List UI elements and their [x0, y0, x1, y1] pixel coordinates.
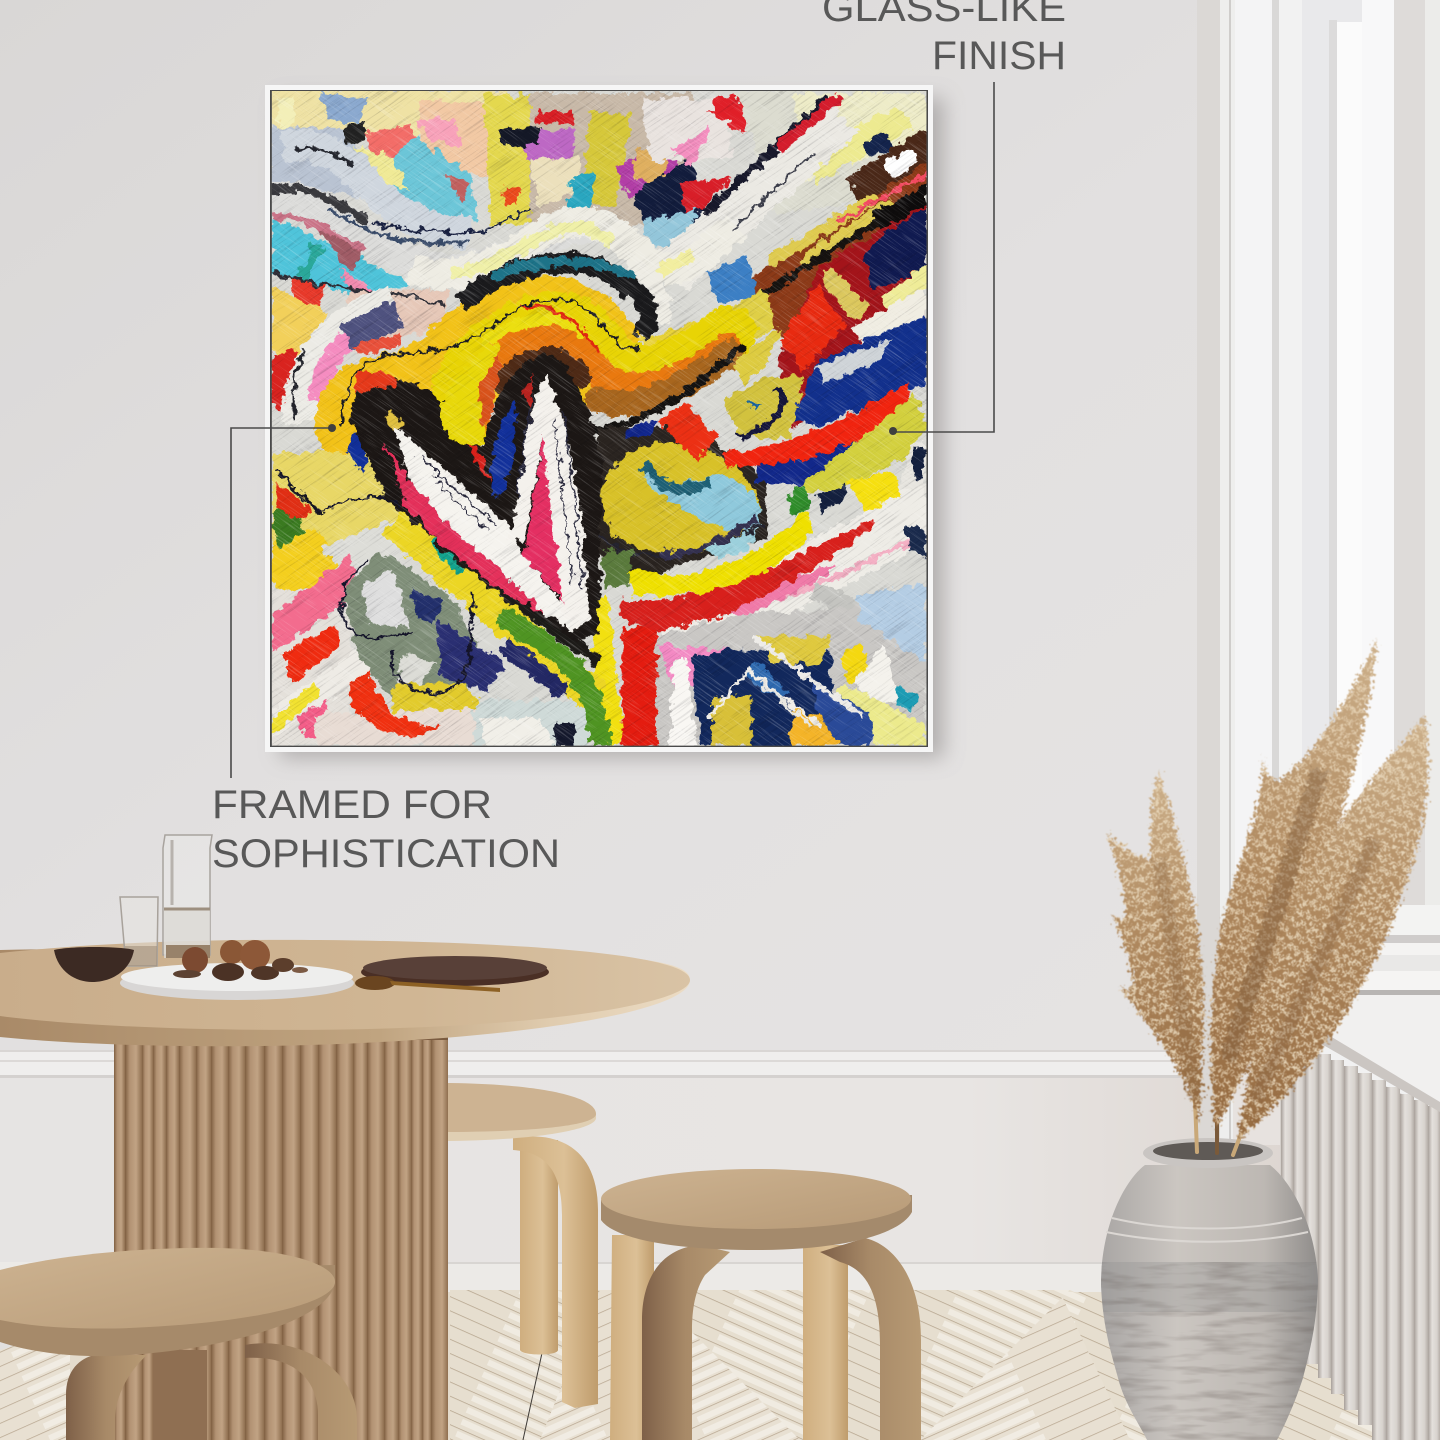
nuts on the board	[173, 940, 308, 981]
round table pedestal	[114, 1030, 448, 1440]
white lower band	[662, 508, 932, 640]
pampas plume center	[1210, 638, 1377, 1130]
callout: glass-like finish: FINISH	[932, 34, 1066, 78]
pampas stems	[1195, 1100, 1250, 1155]
red crescent	[348, 670, 444, 737]
red swoosh lower	[622, 519, 876, 630]
dark wooden plate	[361, 956, 549, 986]
dark wooden bowl	[54, 947, 134, 982]
yellow lobe over heart shoulder	[440, 341, 500, 444]
yellow diagonal band	[393, 521, 598, 743]
callout: framed for sophistication: SOPHISTICATION	[212, 832, 560, 876]
radiator	[1280, 1030, 1440, 1440]
ceramic vase	[1095, 1138, 1325, 1440]
shadow of framed painting	[280, 98, 944, 758]
yellow green block right	[797, 393, 926, 517]
left cyan and pink field	[272, 217, 449, 414]
glass tumbler	[120, 897, 158, 966]
lower right field	[656, 525, 926, 746]
callout: framed for sophistication	[212, 783, 560, 876]
window sill	[1320, 995, 1440, 1102]
left white pink sweep	[293, 305, 402, 423]
wooden spoon	[355, 976, 500, 992]
front stool seat	[601, 1169, 912, 1250]
heart white left arm	[393, 425, 574, 631]
dark streak above arc	[454, 249, 779, 347]
lower pink strip	[385, 442, 543, 613]
green tip	[786, 482, 812, 517]
window frame and panes	[1197, 0, 1440, 1145]
round table top	[0, 940, 690, 1046]
pampas plume left	[1107, 770, 1204, 1125]
arrow: frame leader line	[231, 424, 336, 778]
swirl medallion lower left	[316, 551, 590, 746]
marble serving board	[120, 963, 354, 1000]
pink triangle	[522, 435, 562, 601]
lower left patches	[272, 449, 399, 746]
painting ground	[265, 85, 935, 755]
black line doodles	[278, 470, 473, 694]
callout: framed for sophistication: FRAMED FOR	[212, 783, 492, 827]
big yellow arc	[312, 274, 644, 455]
abstract painting	[272, 91, 926, 746]
upper left colour field	[269, 89, 509, 222]
red stripe and red swoosh	[624, 380, 910, 487]
brush streaks on white heart	[419, 393, 583, 589]
yellow swoosh	[628, 511, 812, 597]
arrow: finish leader line	[889, 82, 994, 435]
brown and red diagonal band	[735, 141, 932, 337]
back stool	[440, 1083, 598, 1408]
wavy grey and white strokes	[272, 128, 531, 252]
gold round form with blue swirl	[594, 427, 767, 581]
upper middle yellow and magenta blocks	[483, 91, 926, 256]
right side dark and red block	[778, 205, 926, 427]
left stool seat	[0, 1248, 335, 1356]
wood floor	[0, 1290, 1400, 1440]
thin black contour line	[342, 299, 641, 427]
wall background	[0, 0, 1440, 1060]
pink wash under swoosh	[731, 564, 833, 619]
books on the sill	[1350, 935, 1440, 995]
gold shape with navy crescent	[724, 329, 803, 440]
baseboard	[0, 1262, 1200, 1292]
white wave band	[410, 222, 735, 274]
lower wall panel	[0, 1060, 1290, 1300]
brush texture overlay	[272, 91, 926, 746]
dado rail moulding	[0, 1050, 1200, 1078]
vertical red and yellow bars	[593, 551, 656, 747]
white floating frame	[265, 85, 933, 752]
white diagonal brush band	[671, 115, 842, 273]
heart coloured lining	[346, 370, 534, 495]
pampas plume right	[1238, 715, 1428, 1140]
heart white right arm	[509, 373, 590, 631]
callout: glass-like finish	[822, 0, 1066, 78]
left stool legs	[66, 1343, 357, 1440]
yellow orange swirl band	[456, 307, 741, 431]
heart black outline	[350, 354, 600, 640]
front stool legs	[610, 1235, 921, 1440]
glass carafe with water	[163, 835, 212, 958]
